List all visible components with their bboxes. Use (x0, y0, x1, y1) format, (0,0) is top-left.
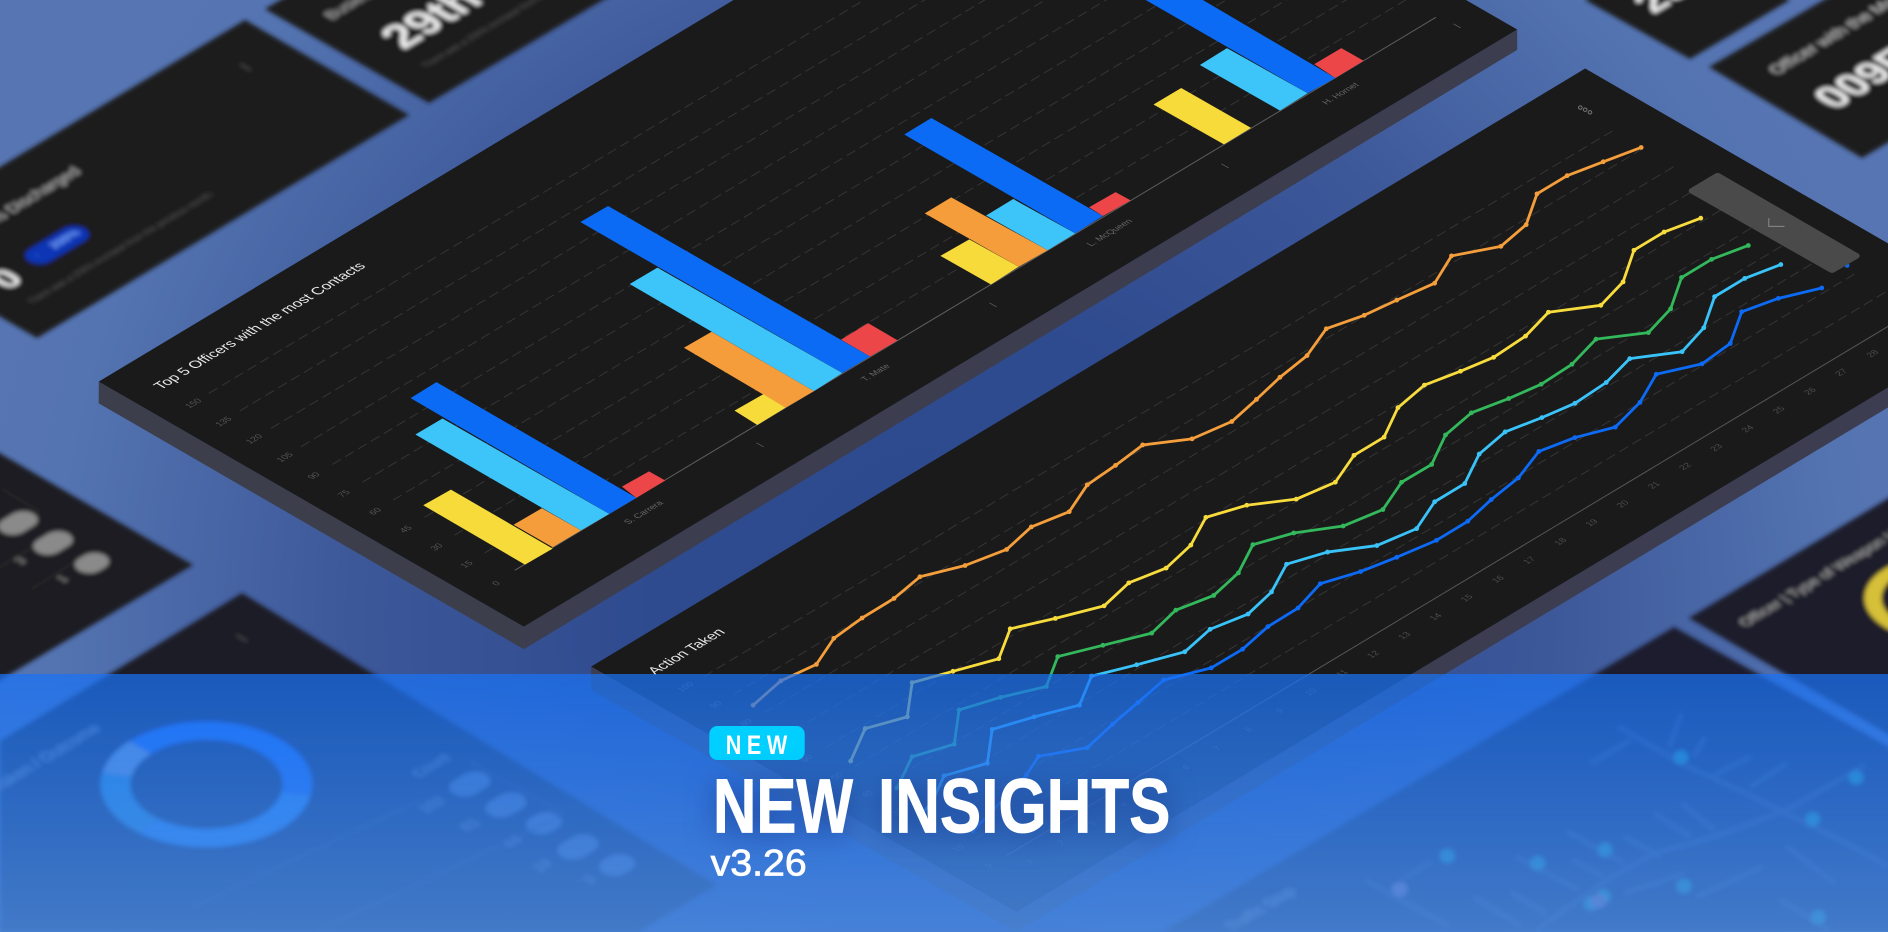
y axis labels: 10 (949, 843, 967, 853)
officer name labels: S. Carrera (621, 499, 665, 526)
officer name labels: | (987, 301, 998, 308)
panel: traffic stop map: Traffic Stop (1221, 885, 1300, 932)
line series: orange (753, 147, 1641, 705)
officer name labels: | (1451, 22, 1462, 29)
chart title: Top 5 Officers with the most Contacts (151, 261, 370, 392)
x axis labels: 9 (1273, 707, 1286, 714)
yellow donut fragment (1873, 561, 1888, 635)
panel: discharged: There was a 200% increase from the previous month. (25, 190, 217, 305)
bars: L. McQueen (904, 118, 1131, 284)
y axis labels: 90 (305, 471, 322, 481)
x axis labels: 26 (1801, 386, 1819, 396)
y axis labels: 60 (366, 506, 384, 516)
x axis labels: 25 (1770, 405, 1787, 415)
y axis labels: 45 (397, 524, 414, 534)
y axis labels: 60 (798, 753, 815, 763)
y axis labels: 70 (768, 735, 785, 745)
title block (709, 726, 1170, 884)
x axis labels: 7 (1211, 745, 1224, 752)
officer name labels: L. McQueen (1084, 217, 1135, 248)
x axis labels: 16 (1489, 574, 1507, 584)
x axis labels: 23 (1708, 442, 1725, 453)
chart title: Action Taken (645, 626, 729, 677)
translucent blue band (0, 674, 1888, 932)
officer name labels: | (754, 441, 765, 448)
y axis labels: 75 (335, 488, 352, 499)
officer name labels (621, 22, 1462, 526)
officer name labels: T. Mate (858, 362, 892, 383)
x axis labels: 1 (1023, 857, 1036, 865)
line series: yellow (851, 218, 1701, 761)
y axis labels: 90 (707, 700, 724, 710)
panel: traffic stop map (1163, 627, 1888, 932)
heading: NEW (713, 763, 853, 849)
heading: INSIGHTS (878, 763, 1170, 849)
panel: action taken line chart (591, 69, 1888, 932)
table numbers: 44 (498, 833, 525, 850)
x axis labels: 24 (1739, 424, 1756, 434)
table numbers: 102 (415, 794, 449, 815)
x axis labels: 20 (1614, 499, 1631, 509)
table numbers: 19 (528, 857, 555, 874)
new badge: NEW (726, 731, 793, 761)
x axis labels: 10 (1302, 687, 1319, 697)
y axis labels: 30 (428, 542, 445, 552)
y axis labels: 50 (828, 771, 846, 781)
bars: H. Hornet (1146, 0, 1364, 144)
bars: S. Carrera (411, 382, 665, 565)
x axis labels: 11 (1334, 668, 1350, 678)
x axis labels: 4 (1117, 801, 1130, 808)
table numbers: Count (408, 752, 454, 779)
x axis labels: 12 (1364, 649, 1382, 659)
x axis labels: 13 (1396, 630, 1413, 641)
panel: table left: 1 (53, 573, 72, 584)
y axis labels: 80 (737, 717, 755, 728)
x axis labels: 15 (1458, 593, 1475, 603)
x axis labels: 19 (1583, 518, 1600, 528)
y axis labels: 0 (982, 862, 995, 869)
panel: discharged: 200% (45, 227, 84, 250)
line series: light blue (921, 265, 1781, 815)
panel: officer weapon type (1689, 403, 1888, 827)
panel: action taken outcome donut (0, 593, 716, 932)
tooltip (1693, 176, 1855, 270)
x axis labels (1023, 348, 1881, 865)
y axis labels: 150 (183, 397, 204, 410)
y axis labels: 120 (243, 433, 265, 445)
panel: table left: 3 (11, 555, 30, 566)
table numbers (408, 752, 599, 886)
y axis labels: 0 (490, 580, 503, 587)
map markers (1392, 751, 1863, 924)
panel: officer with the most (1709, 0, 1888, 158)
x axis labels: 17 (1520, 555, 1538, 565)
officer name labels: | (1219, 162, 1230, 169)
x axis labels: 22 (1676, 461, 1694, 471)
y axis labels: 105 (274, 451, 296, 463)
y axis labels: 135 (213, 415, 234, 428)
line series: blue (973, 288, 1822, 831)
version: v3.26 (711, 843, 807, 884)
table numbers: 3 (578, 873, 599, 886)
panel: top right stat (1585, 0, 1790, 59)
panel: discharged (0, 20, 409, 338)
x axis labels: 3 (1086, 820, 1099, 827)
panel slab (99, 0, 1517, 649)
panel slab (591, 69, 1888, 932)
x axis labels: 2 (1055, 839, 1068, 846)
y axis labels: 15 (458, 559, 475, 569)
x axis labels: 27 (1832, 367, 1850, 377)
panel: busiest day (265, 0, 662, 103)
x axis labels: 8 (1242, 726, 1255, 733)
y axis labels (183, 397, 503, 587)
y axis labels: 20 (919, 825, 936, 835)
new badge (709, 726, 805, 761)
donut chart (78, 708, 335, 860)
y axis labels: 30 (889, 807, 906, 817)
y axis labels: 100 (675, 680, 696, 693)
y axis labels: 40 (859, 789, 876, 799)
map roads (1365, 713, 1888, 930)
table numbers: 81 (456, 816, 483, 833)
panel: discharged: ↑ (31, 252, 45, 260)
panel: top 5 officers bar chart (99, 0, 1517, 649)
officer name labels: H. Hornet (1320, 81, 1362, 106)
panel: table left (0, 384, 193, 716)
hidden series end dot (1845, 263, 1849, 268)
x axis labels: 21 (1645, 480, 1663, 490)
x axis labels: 14 (1427, 612, 1444, 622)
y axis labels (675, 680, 995, 869)
bars: T. Mate (580, 206, 898, 425)
x axis labels: 6 (1179, 763, 1192, 771)
menu dots (1579, 106, 1592, 114)
line series: green (897, 245, 1748, 788)
table pills (444, 769, 640, 879)
heading (713, 763, 1170, 849)
x axis labels: 5 (1148, 782, 1161, 790)
x axis labels: 28 (1864, 348, 1881, 359)
x axis labels: 18 (1552, 536, 1569, 547)
